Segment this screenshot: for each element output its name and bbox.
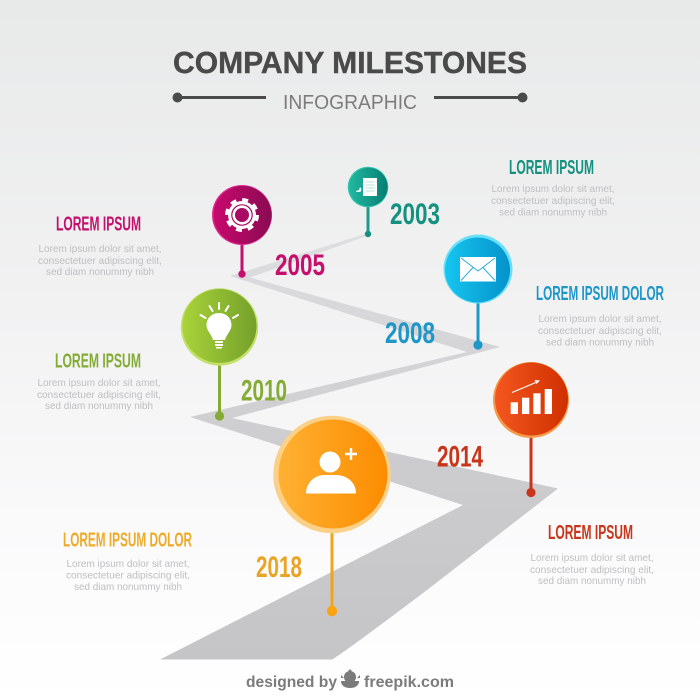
subtitle with side rules: INFOGRAPHIC [283, 92, 417, 114]
freepik credit: designed by [246, 674, 337, 691]
freepik credit: freepik.com [364, 674, 454, 691]
year 2008: 2008 [385, 317, 435, 350]
label 2008 [536, 283, 664, 348]
label 2003: LOREM IPSUM [509, 157, 594, 179]
icon: light bulb [200, 303, 238, 348]
label 2005: sed diam nonummy nibh [46, 266, 154, 278]
label 2005 [38, 214, 162, 278]
icon: gear [228, 200, 256, 230]
label 2010: LOREM IPSUM [55, 350, 141, 372]
label 2005: Lorem ipsum dolor sit amet, [38, 243, 162, 255]
year 2003: 2003 [390, 198, 440, 231]
label 2018 [63, 530, 192, 593]
milestone 2010 pin [181, 288, 258, 421]
year 2014: 2014 [437, 440, 483, 474]
label 2003: sed diam nonummy nibh [499, 206, 607, 218]
label 2018: consectetuer adipiscing elit, [66, 570, 190, 582]
icon: freepik logo [341, 670, 360, 688]
label 2003: consectetuer adipiscing elit, [491, 195, 615, 207]
label 2010: Lorem ipsum dolor sit amet, [38, 377, 160, 389]
label 2014: Lorem ipsum dolor sit amet, [530, 552, 654, 564]
freepik credit [246, 670, 454, 691]
label 2005: consectetuer adipiscing elit, [38, 255, 162, 267]
year 2010: 2010 [241, 374, 287, 408]
label 2008: Lorem ipsum dolor sit amet, [538, 313, 662, 325]
milestone 2008 pin [444, 234, 512, 350]
label 2014 [530, 522, 654, 587]
label 2005: LOREM IPSUM [56, 214, 141, 236]
label 2014: consectetuer adipiscing elit, [530, 564, 654, 576]
milestone 2005 pin [212, 185, 272, 278]
icon: add user [306, 448, 357, 494]
label 2008: consectetuer adipiscing elit, [538, 325, 662, 337]
title: COMPANY MILESTONES [173, 45, 527, 80]
label 2008: sed diam nonummy nibh [546, 336, 654, 348]
subtitle with side rules [172, 92, 528, 114]
label 2018: sed diam nonummy nibh [74, 581, 182, 593]
year 2005: 2005 [275, 249, 325, 282]
label 2014: LOREM IPSUM [548, 522, 633, 544]
label 2010: sed diam nonummy nibh [45, 400, 153, 412]
icon: rising bar chart [511, 380, 552, 414]
label 2014: sed diam nonummy nibh [538, 575, 646, 587]
label 2003: Lorem ipsum dolor sit amet, [492, 183, 614, 195]
milestone 2018 pin [273, 416, 391, 616]
milestone 2003 pin [348, 167, 388, 237]
label 2003 [491, 157, 615, 218]
label 2010 [37, 350, 161, 412]
icon: envelope [460, 257, 496, 282]
label 2018: Lorem ipsum dolor sit amet, [66, 558, 190, 570]
year 2018: 2018 [256, 551, 302, 584]
winding road [160, 234, 558, 660]
label 2010: consectetuer adipiscing elit, [37, 389, 161, 401]
label 2018: LOREM IPSUM DOLOR [63, 530, 192, 552]
milestone 2014 pin [493, 362, 569, 497]
icon: document [356, 178, 377, 196]
